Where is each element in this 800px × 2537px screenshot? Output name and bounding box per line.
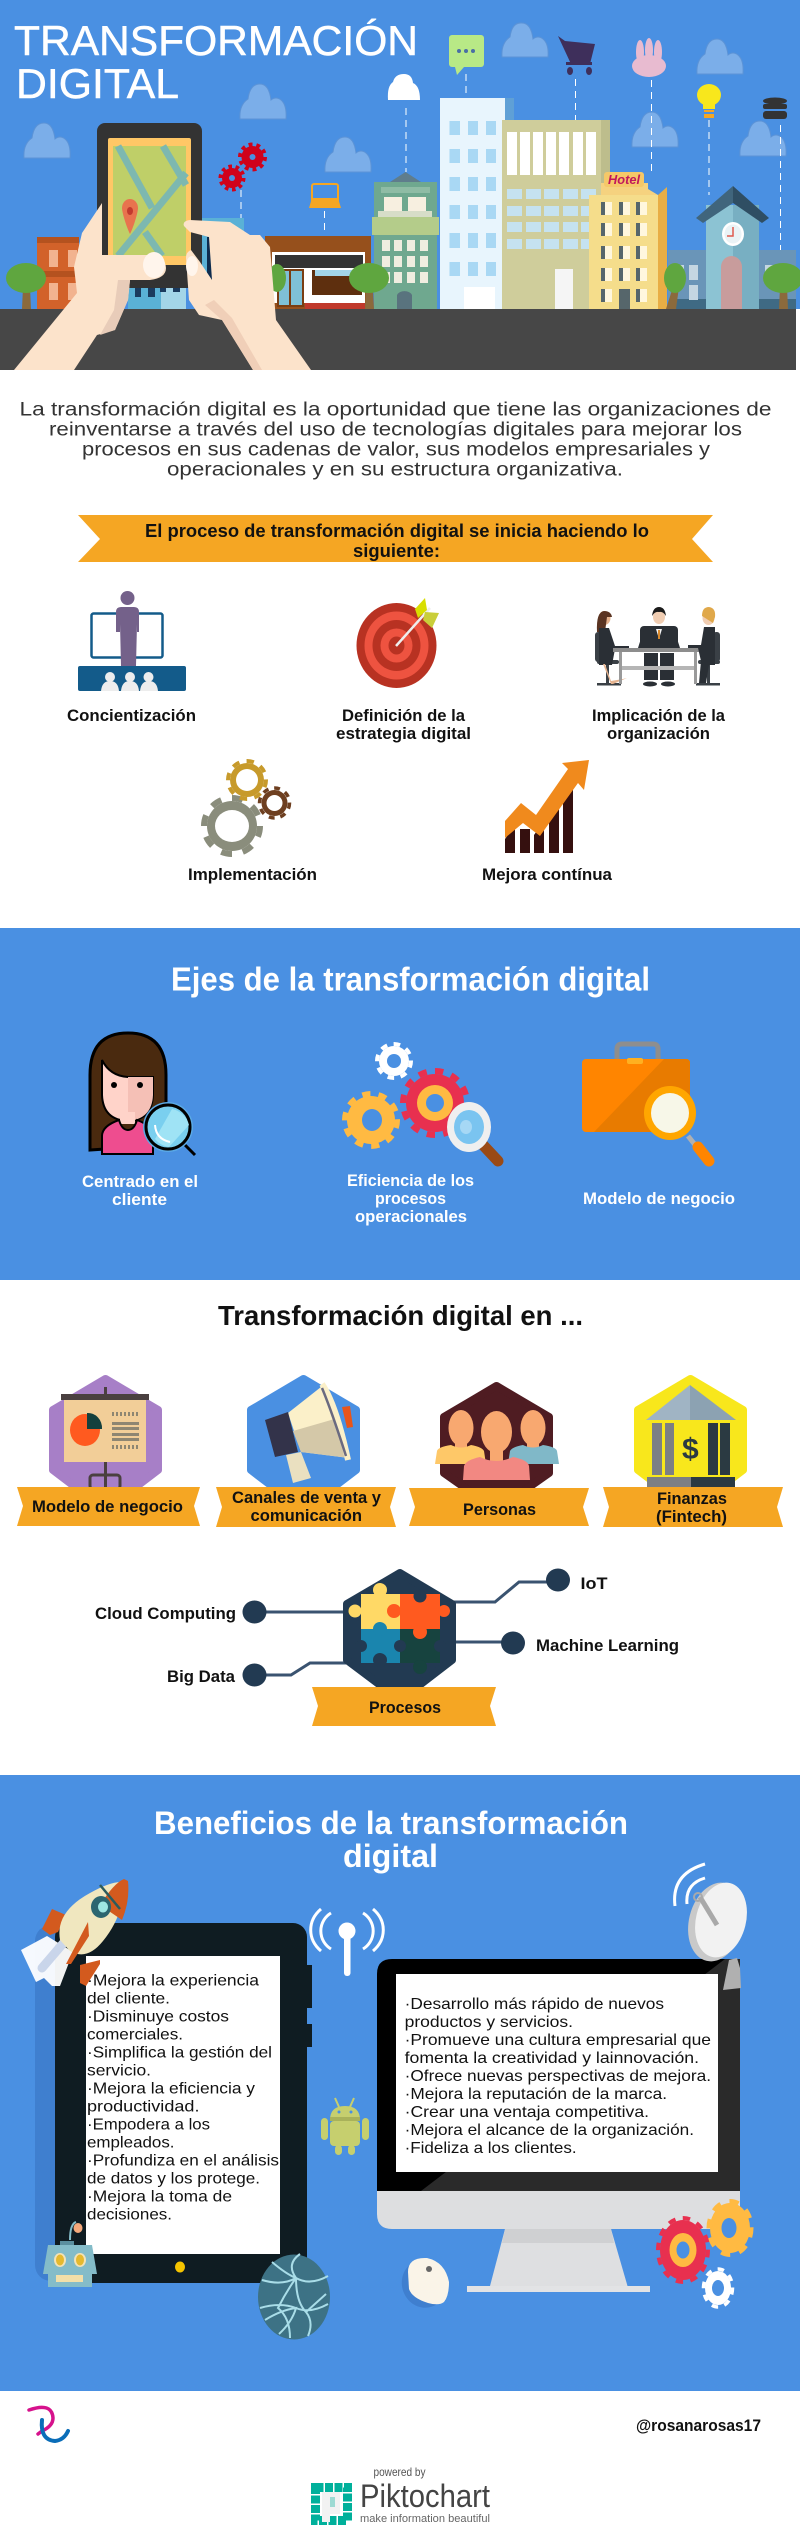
list: right benefits: ·Ofrece nuevas perspectivas de mejora.	[405, 2068, 711, 2085]
icon: satellite dish	[675, 1864, 754, 1990]
ribbon	[17, 1487, 200, 1526]
phone with map	[97, 123, 202, 288]
list: left benefits: ·Mejora la experiencia	[87, 1973, 259, 1990]
card: Personas: Personas	[463, 1500, 536, 1519]
icon: mouse	[395, 2254, 453, 2314]
step: Implicación de la organización: Implicación de la	[592, 706, 726, 725]
icon: bank	[646, 1385, 736, 1487]
icon: presenter	[78, 591, 186, 691]
diagram: procesos: Procesos	[369, 1698, 441, 1717]
list: right benefits: ·Fideliza a los clientes.	[405, 2140, 577, 2157]
icon: megaphone	[265, 1384, 353, 1483]
step: Concientización	[67, 591, 196, 725]
footer: piktochart credit	[316, 2465, 490, 2525]
card: Finanzas (Fintech): (Fintech)	[656, 1507, 727, 1526]
list: right benefits: fomenta la creatividad y lainnovación.	[405, 2050, 699, 2067]
logo: author mark	[29, 2407, 68, 2441]
step: Implicación de la organización: organización	[607, 724, 710, 743]
building row: Hotel	[608, 172, 640, 187]
list: right benefits: ·Desarrollo más rápido de nuevos	[405, 1996, 664, 2013]
icon: rising chart	[505, 760, 589, 853]
card: Personas	[409, 1386, 589, 1526]
list: left benefits: ·Simplifica la gestión del	[87, 2045, 272, 2062]
step: Definición de la estrategia digital	[336, 598, 471, 743]
heading: beneficios: digital	[343, 1838, 438, 1874]
card: Modelo de negocio	[17, 1379, 200, 1526]
intro text: reinventarse a través del uso de tecnologías digitales para mejorar los	[49, 420, 742, 440]
icon: briefcase with magnifier	[582, 1044, 709, 1161]
connector: Machine Learning	[450, 1632, 679, 1655]
step: Definición de la estrategia digital: estrategia digital	[336, 724, 471, 743]
footer: piktochart credit: Piktochart	[360, 2478, 490, 2514]
ribbon: procesos	[312, 1687, 496, 1726]
list: right benefits: ·Mejora la reputación de la marca.	[405, 2086, 667, 2103]
label: eficiencia	[347, 1171, 474, 1226]
ribbon	[603, 1487, 783, 1527]
icon: bank: $	[682, 1433, 699, 1466]
author handle: @rosanarosas17	[636, 2416, 761, 2435]
card: Finanzas (Fintech): Finanzas	[657, 1489, 727, 1508]
list: left benefits: de datos y los protege.	[87, 2171, 260, 2188]
step: Definición de la estrategia digital: Definición de la	[342, 706, 466, 725]
icon: rocket	[21, 1879, 128, 1986]
list: left benefits: empleados.	[87, 2135, 174, 2152]
intro text: La transformación digital es la oportunidad que tiene las organizaciones de	[20, 400, 771, 420]
panel: beneficios	[0, 1775, 800, 2391]
label: modelo de negocio: Modelo de negocio	[583, 1189, 735, 1208]
diagram: procesos	[95, 1568, 679, 1726]
icon: meeting	[595, 607, 720, 686]
card: Canales de venta y comunicación: comunicación	[250, 1506, 362, 1525]
list: left benefits: servicio.	[87, 2063, 151, 2080]
panel: ejes	[0, 928, 800, 1280]
step: Mejora contínua: Mejora contínua	[482, 865, 613, 884]
list: left benefits: ·Mejora la toma de	[87, 2189, 232, 2206]
label: centrado en el cliente: cliente	[112, 1190, 167, 1209]
title	[14, 17, 418, 107]
step: Implementación	[188, 761, 317, 884]
label: centrado en el cliente	[82, 1172, 198, 1209]
icon: people	[435, 1410, 559, 1480]
title: TRANSFORMACIÓN	[14, 17, 418, 64]
intro text: operacionales y en su estructura organizativa.	[167, 460, 623, 480]
heading: beneficios	[154, 1805, 628, 1874]
list: right benefits: ·Promueve una cultura empresarial que	[405, 2032, 711, 2049]
icon: globe network	[258, 2254, 330, 2340]
connector: Cloud Computing: Cloud Computing	[95, 1604, 236, 1623]
connector: Cloud Computing	[95, 1600, 346, 1624]
banner: process heading: El proceso de transformación digital se inicia haciendo lo	[145, 521, 649, 541]
connector: IoT: IoT	[580, 1574, 608, 1593]
footer: piktochart credit: powered by	[374, 2465, 426, 2479]
footer: piktochart credit: make information beautiful	[360, 2513, 490, 2525]
connector: Big Data	[167, 1663, 346, 1686]
heading: beneficios: Beneficios de la transformación	[154, 1805, 628, 1841]
icon: process gears	[345, 1044, 498, 1161]
intro text: procesos en sus cadenas de valor, sus modelos empresariales y	[82, 440, 711, 460]
trees	[6, 263, 800, 309]
list: left benefits	[87, 1973, 279, 2224]
banner: process heading: siguiente:	[353, 541, 440, 561]
heading: ejes: Ejes de la transformación digital	[171, 960, 650, 998]
hands holding phone	[14, 203, 311, 370]
icon: gears	[204, 761, 290, 854]
list: left benefits: ·Mejora la eficiencia y	[87, 2081, 255, 2098]
list: left benefits: ·Empodera a los	[87, 2117, 210, 2134]
connector: IoT	[450, 1568, 608, 1602]
icon: android	[321, 2098, 369, 2155]
icon: target	[356, 598, 439, 688]
intro text	[20, 400, 771, 480]
ribbon	[409, 1488, 589, 1526]
list: left benefits: del cliente.	[87, 1991, 170, 2008]
label: eficiencia: operacionales	[355, 1207, 467, 1226]
list: left benefits: ·Profundiza en el análisis	[87, 2153, 279, 2170]
icon: customer with magnifier	[90, 1033, 195, 1155]
list: right benefits	[405, 1996, 711, 2157]
icon: robot	[43, 2222, 97, 2287]
list: left benefits: productividad.	[87, 2099, 200, 2116]
list: right benefits: ·Crear una ventaja competitiva.	[405, 2104, 649, 2121]
tablet	[35, 1923, 312, 2283]
connector: Machine Learning: Machine Learning	[536, 1636, 679, 1655]
icon: puzzle	[348, 1583, 450, 1674]
list: left benefits: decisiones.	[87, 2207, 172, 2224]
step: Implicación de la organización	[592, 607, 726, 743]
heading: transformación digital en: Transformación digital en ...	[218, 1300, 583, 1331]
label: eficiencia: Eficiencia de los	[347, 1171, 474, 1190]
list: left benefits: ·Disminuye costos	[87, 2009, 229, 2026]
card: Finanzas (Fintech)	[603, 1379, 783, 1527]
list: left benefits: comerciales.	[87, 2027, 183, 2044]
card: Canales de venta y comunicación	[216, 1379, 396, 1527]
hero illustration: digital city	[0, 0, 800, 370]
step: Implementación: Implementación	[188, 865, 317, 884]
connector: Big Data: Big Data	[167, 1667, 236, 1686]
building row	[37, 98, 796, 309]
ribbon	[216, 1487, 396, 1527]
title: DIGITAL	[16, 60, 179, 107]
icon: wifi antenna	[311, 1909, 383, 1976]
step: Concientización: Concientización	[67, 706, 196, 725]
label: eficiencia: procesos	[375, 1189, 446, 1208]
list: right benefits: ·Mejora el alcance de la organización.	[405, 2122, 694, 2139]
banner: process heading	[78, 515, 713, 562]
card: Canales de venta y comunicación: Canales de venta y	[232, 1488, 382, 1507]
label: centrado en el cliente: Centrado en el	[82, 1172, 198, 1191]
monitor	[377, 1959, 740, 2292]
icon: colorful gears	[658, 2202, 751, 2307]
icon: piktochart mark	[316, 2488, 348, 2522]
list: right benefits: productos y servicios.	[405, 2014, 573, 2031]
step: Mejora contínua	[482, 760, 613, 884]
icon: presentation board	[61, 1387, 149, 1489]
card: Modelo de negocio: Modelo de negocio	[32, 1497, 183, 1516]
